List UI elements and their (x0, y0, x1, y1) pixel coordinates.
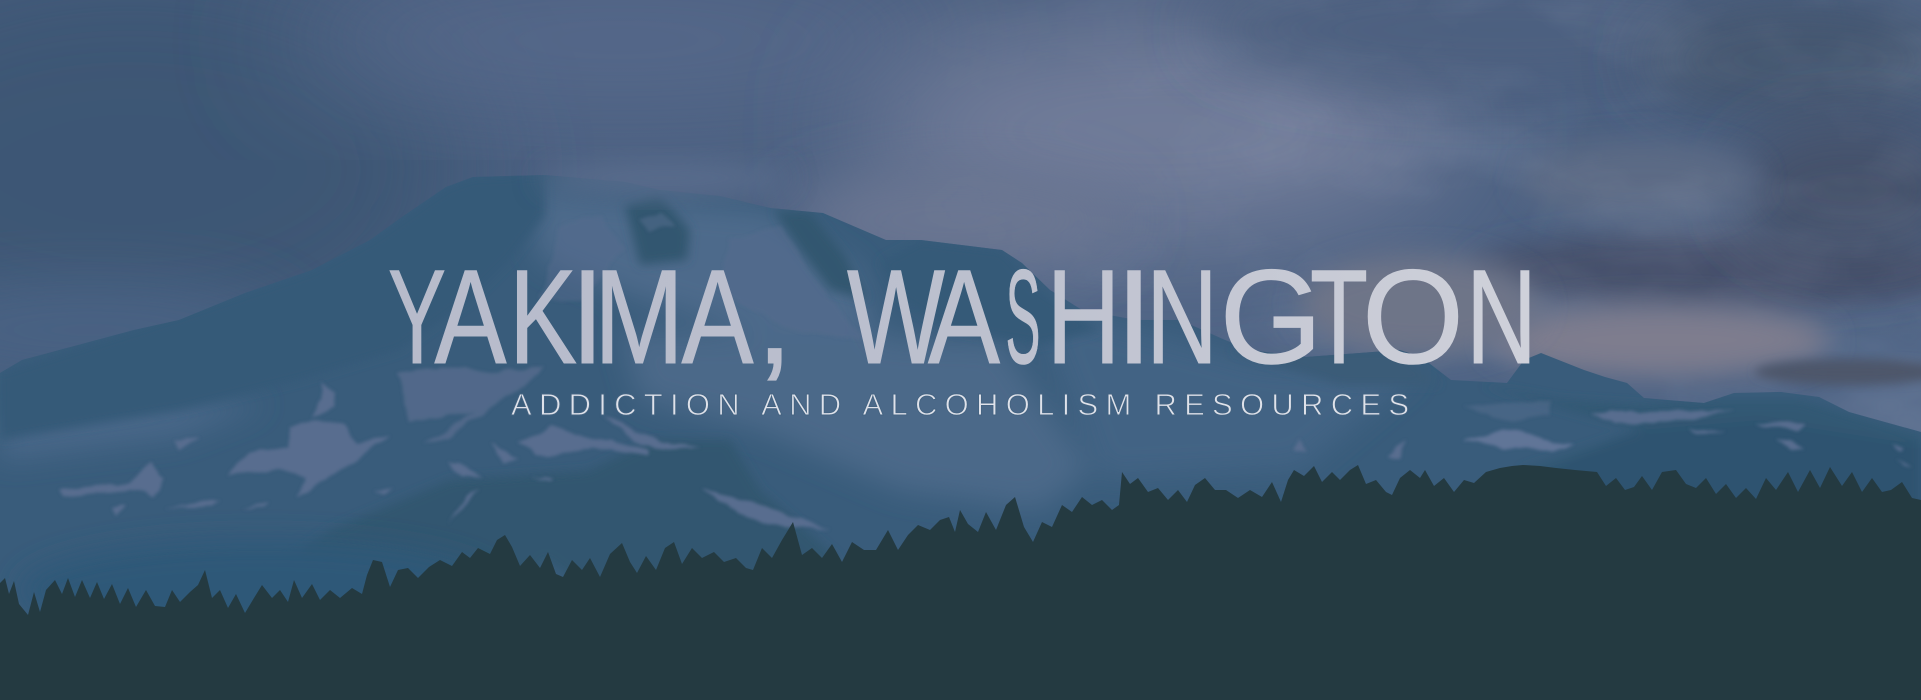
title: K (509, 243, 577, 392)
mountain haze over slopes (0, 190, 1420, 510)
title: Y (388, 243, 446, 392)
title: O (1362, 243, 1464, 392)
mountain snow patches (58, 212, 1913, 530)
title: A (928, 243, 1000, 392)
title: T (1310, 243, 1368, 392)
title: W (847, 243, 945, 392)
tree line forest (0, 465, 1921, 700)
title: I (571, 243, 604, 392)
title: M (594, 243, 684, 392)
cloud texture (1293, 0, 1921, 432)
title: H (1046, 243, 1120, 392)
title: A (682, 243, 754, 392)
summit cloud veil (540, 162, 790, 194)
title: I (1116, 243, 1152, 392)
title: A (434, 243, 507, 392)
mountain massif (0, 175, 1921, 615)
mountain dark rock (2, 186, 1920, 576)
sky with clouds (0, 0, 1921, 432)
title: S (1006, 243, 1040, 392)
title: N (1146, 243, 1218, 392)
title: N (1466, 243, 1537, 392)
subtitle: ADDICTION AND ALCOHOLISM RESOURCES (511, 387, 1409, 422)
title: G (1220, 243, 1322, 392)
title: , (756, 243, 793, 392)
